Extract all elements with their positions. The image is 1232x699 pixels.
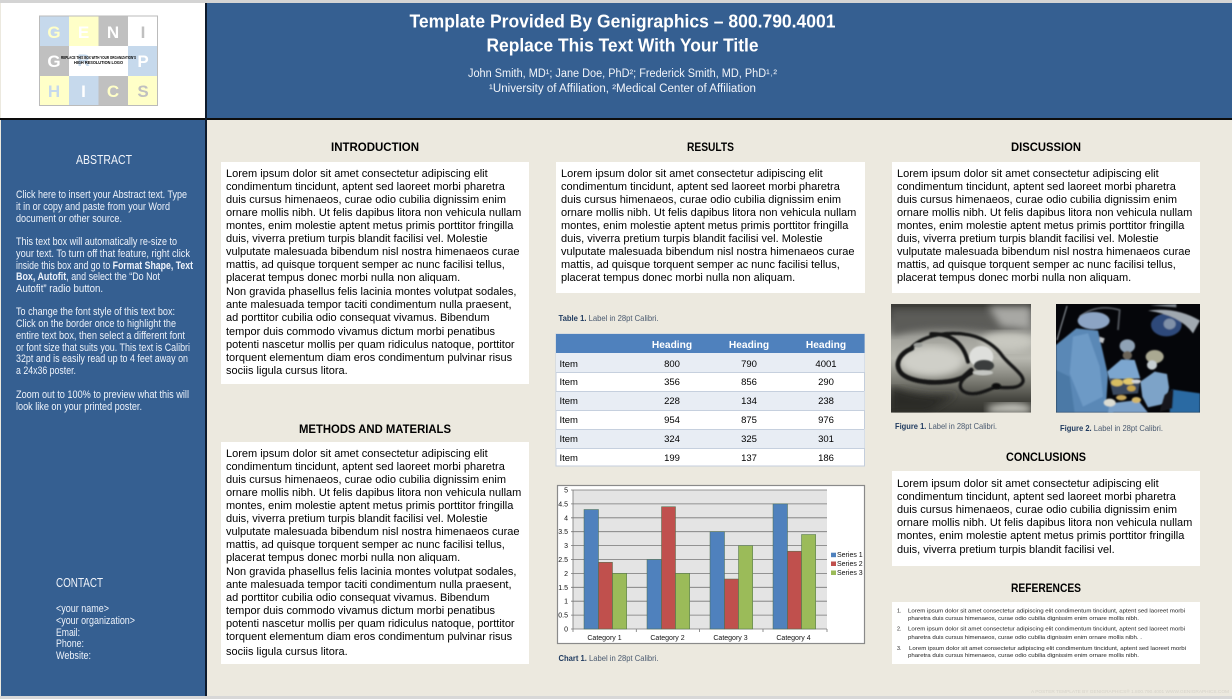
references list: 1. (897, 608, 902, 614)
right surgeon (1140, 350, 1169, 407)
chart y axis labels: 1 (564, 599, 568, 606)
table body rows: Item (560, 434, 578, 445)
chart y axis labels: 2.5 (558, 557, 568, 564)
logo placeholder grid: I (141, 23, 145, 42)
conclusions text: Lorem ipsum dolor sit amet consectetur adipiscing elit (897, 478, 1159, 490)
results text: mattis, ad quisque torquent semper ac nunc facilisi tellus, (561, 259, 840, 271)
results text: duis cursus himenaeos, curae odio cubilia dignissim enim (561, 194, 841, 206)
panel: references (892, 581, 1200, 664)
table body rows: Item (560, 415, 578, 426)
sidebar (1, 120, 205, 696)
abstract text: a 24x36 poster. (16, 365, 76, 377)
bar chart (558, 486, 864, 644)
methods text: mattis, ad quisque torquent semper ac nunc facilisi tellus, (226, 539, 505, 551)
introduction text: mattis, ad quisque torquent semper ac nunc facilisi tellus, (226, 259, 505, 271)
references list: pharetra duis cursus himenaeos, curae odio cubilia dignissim enim ornare mollis nibh. (908, 653, 1139, 659)
table body rows: 290 (818, 377, 834, 388)
abstract text: look like on your printed poster. (16, 401, 142, 413)
abstract text: your text. To turn off that feature, right click (16, 248, 190, 260)
references list: Lorem ipsum dolor sit amet consectetur adipiscing elit condimentum tincidunt, aptent sed laoreet morbi (909, 646, 1186, 652)
data table (556, 334, 864, 466)
results text: condimentum tincidunt, aptent sed laoreet morbi pharetra (561, 181, 841, 193)
chart y axis labels (558, 488, 568, 634)
discussion text: placerat tempus donec morbi nulla non aliquam. (897, 272, 1131, 284)
chart y axis labels: 4 (564, 515, 568, 522)
table body rows: 134 (741, 396, 757, 407)
chart legend: Series 3 (837, 570, 863, 577)
chart x axis labels: Category 2 (650, 635, 685, 642)
introduction text: tempor duis commodo vivamus dictum morbi penatibus (226, 326, 496, 338)
table header row: Heading (652, 340, 692, 351)
introduction text: Non gravida phasellus felis lacinia montes volutpat sodales, (226, 286, 516, 298)
figure 2 caption: Figure 2. Label in 28pt Calibri. (1060, 423, 1163, 433)
methods text: condimentum tincidunt, aptent sed laoreet morbi pharetra (226, 461, 506, 473)
abstract text: document or other source. (16, 213, 122, 225)
methods text: Non gravida phasellus felis lacinia montes volutpat sodales, (226, 566, 516, 578)
chart y axis labels: 3.5 (558, 529, 568, 536)
contact details: <your organization> (56, 615, 135, 627)
authors and affiliations: ¹University of Affiliation, ²Medical Center of Affiliation (489, 83, 756, 95)
logo placeholder grid: P (137, 52, 149, 71)
footer credit: A POSTER TEMPLATE BY GENIGRAPHICS® 1.800.790.4001 WWW.GENIGRAPHICS.COM (1031, 688, 1229, 694)
logo placeholder grid: R (77, 51, 90, 70)
chart y axis labels: 3 (564, 543, 568, 550)
panel: discussion (892, 140, 1200, 293)
title (410, 12, 836, 56)
table body rows: 228 (664, 396, 680, 407)
contact details (56, 603, 135, 662)
logo placeholder grid: REPLACE THIS BOX WITH YOUR ORGANIZATION'S (61, 55, 136, 60)
introduction text: sociis ligula cursus litora. (226, 365, 348, 377)
references list: 3. (897, 646, 902, 652)
methods text: Lorem ipsum dolor sit amet consectetur adipiscing elit (226, 448, 488, 460)
table body rows: 800 (664, 359, 680, 370)
discussion text: condimentum tincidunt, aptent sed laoreet morbi pharetra (897, 181, 1177, 193)
chart legend (831, 552, 863, 577)
methods text: ad porttitor cubilia odio consequat vivamus. Bibendum (226, 592, 490, 604)
discussion text: duis, viverra pretium turpis blandit facilisi vel. Molestie (897, 233, 1159, 245)
methods text: potenti nascetur mollis per quam ridiculus natoque, porttitor (226, 618, 515, 630)
heading: results: RESULTS (687, 140, 734, 154)
table body rows: 238 (818, 396, 834, 407)
introduction text: duis, viverra pretium turpis blandit facilisi vel. Molestie (226, 233, 488, 245)
table header row: Heading (806, 340, 846, 351)
chart y axis labels: 5 (564, 488, 568, 494)
introduction text: condimentum tincidunt, aptent sed laoreet morbi pharetra (226, 181, 506, 193)
contact details: Phone: (56, 638, 84, 650)
chart x axis labels: Category 4 (776, 635, 811, 642)
table body rows: 324 (664, 434, 680, 445)
title: Template Provided By Genigraphics – 800.790.4001 (410, 12, 836, 32)
introduction text: vulputate malesuada bibendum nisl nostra himenaeos curae (226, 246, 520, 258)
discussion text: Lorem ipsum dolor sit amet consectetur adipiscing elit (897, 168, 1159, 180)
abstract text: To change the font style of this text box: (16, 306, 175, 318)
table body rows: Item (560, 377, 578, 388)
abstract text: This text box will automatically re-size to (16, 236, 177, 248)
chart bars: series 2 (598, 507, 802, 629)
table body rows (560, 359, 837, 464)
logo placeholder grid: C (107, 82, 119, 101)
results text: Lorem ipsum dolor sit amet consectetur adipiscing elit (561, 168, 823, 180)
abstract text: Zoom out to 100% to preview what this will (16, 389, 189, 401)
panel: introduction (221, 140, 529, 384)
conclusions text: ornare mollis nibh. Ut felis dapibus litora non vehicula nullam (897, 517, 1192, 529)
left surgeon (1056, 312, 1114, 413)
logo placeholder grid: G (47, 52, 61, 71)
logo placeholder grid: H (48, 82, 60, 101)
table body rows: 137 (741, 453, 757, 464)
abstract text: inside this box and go to Format Shape, Text (16, 260, 193, 272)
abstract text: Click here to insert your Abstract text. Type (16, 189, 187, 201)
logo placeholder grid: S (137, 82, 149, 101)
heading: conclusions: CONCLUSIONS (1006, 450, 1086, 464)
chart legend: Series 2 (837, 561, 863, 568)
methods text: duis cursus himenaeos, curae odio cubilia dignissim enim (226, 474, 506, 486)
contact details: Website: (56, 650, 91, 662)
references list: 2. (897, 626, 902, 632)
table body rows: Item (560, 453, 578, 464)
logo placeholder grid: N (107, 23, 119, 42)
table body rows: 875 (741, 415, 757, 426)
title: Replace This Text With Your Title (486, 36, 758, 56)
introduction text: montes, enim molestie aptent metus primis porttitor fringilla (226, 220, 514, 232)
table body rows: Item (560, 359, 578, 370)
chart y axis labels: 2 (564, 571, 568, 578)
middle surgeon (1107, 339, 1140, 380)
panel: results (556, 140, 865, 293)
references list: Lorem ipsum dolor sit amet consectetur adipiscing elit condimentum tincidunt, aptent sed laoreet morbi (908, 626, 1185, 632)
chart y axis labels: 0 (564, 626, 568, 634)
discussion text (897, 168, 1192, 284)
panel: methods and materials (221, 422, 529, 664)
abstract text: Box, Autofit, and select the “Do Not (16, 271, 161, 283)
chart y axis labels: 1.5 (558, 585, 568, 592)
logo placeholder grid: E (78, 23, 89, 42)
references list: Lorem ipsum dolor sit amet consectetur adipiscing elit condimentum tincidunt, aptent sed laoreet morbi (908, 608, 1185, 614)
abstract text (16, 189, 193, 413)
references list (897, 608, 1186, 659)
surgical lights (1057, 304, 1200, 340)
heading: methods and materials: METHODS AND MATERIALS (299, 422, 451, 436)
introduction text: duis cursus himenaeos, curae odio cubilia dignissim enim (226, 194, 506, 206)
heading: introduction: INTRODUCTION (331, 140, 419, 154)
chart y axis labels: 4.5 (558, 502, 568, 508)
methods text: ornare mollis nibh. Ut felis dapibus litora non vehicula nullam (226, 487, 521, 499)
methods text: ante malesuada tempor taciti condimentum nulla praesent, (226, 579, 512, 591)
table body rows: 790 (741, 359, 757, 370)
heading: references: REFERENCES (1011, 581, 1081, 595)
authors and affiliations: John Smith, MD¹; Jane Doe, PhD²; Frederick Smith, MD, PhD¹˒² (468, 68, 777, 80)
logo placeholder grid: I (81, 82, 86, 101)
introduction text: Lorem ipsum dolor sit amet consectetur adipiscing elit (226, 168, 488, 180)
discussion text: mattis, ad quisque torquent semper ac nunc facilisi tellus, (897, 259, 1176, 271)
figure 2: surgeons photo (1056, 304, 1200, 413)
discussion text: montes, enim molestie aptent metus primis porttitor fringilla (897, 220, 1185, 232)
conclusions text: duis, viverra pretium turpis blandit facilisi vel. (897, 544, 1115, 556)
introduction text (226, 168, 521, 377)
chart bars: series 3 (612, 534, 816, 629)
introduction text: potenti nascetur mollis per quam ridiculus natoque, porttitor (226, 339, 515, 351)
references list: pharetra duis cursus himenaeos, curae odio cubilia dignissim enim ornare mollis nibh. . (908, 635, 1142, 641)
header banner (207, 3, 1232, 118)
table header row (652, 340, 846, 351)
conclusions text: duis cursus himenaeos, curae odio cubilia dignissim enim (897, 504, 1177, 516)
table body rows: 976 (818, 415, 834, 426)
abstract text: Autofit” radio button. (16, 283, 103, 295)
table body rows: 4001 (815, 359, 837, 370)
chart x axis labels: Category 1 (587, 635, 622, 642)
contact details: <your name> (56, 603, 109, 615)
table body rows: 301 (818, 434, 834, 445)
chart y axis labels: 0.5 (558, 613, 568, 620)
introduction text: placerat tempus donec morbi nulla non aliquam. (226, 272, 460, 284)
table body rows: 856 (741, 377, 757, 388)
discussion text: ornare mollis nibh. Ut felis dapibus litora non vehicula nullam (897, 207, 1192, 219)
conclusions text (897, 478, 1192, 556)
table body rows: 954 (664, 415, 680, 426)
conclusions text: condimentum tincidunt, aptent sed laoreet morbi pharetra (897, 491, 1177, 503)
abstract text: entire text box, then select a different font (16, 330, 186, 342)
references list: pharetra duis cursus himenaeos, curae odio cubilia dignissim enim ornare mollis nibh. (908, 616, 1139, 622)
introduction text: ante malesuada tempor taciti condimentum nulla praesent, (226, 299, 512, 311)
methods text: montes, enim molestie aptent metus primis porttitor fringilla (226, 500, 514, 512)
table header row: Heading (729, 340, 769, 351)
table caption: Table 1. Label in 28pt Calibri. (558, 313, 658, 323)
discussion text: duis cursus himenaeos, curae odio cubilia dignissim enim (897, 194, 1177, 206)
methods text: placerat tempus donec morbi nulla non aliquam. (226, 552, 460, 564)
table body rows: 325 (741, 434, 757, 445)
table body rows: Item (560, 396, 578, 407)
introduction text: torquent elementum diam eros condimentum pulvinar risus (226, 352, 513, 364)
panel: conclusions (892, 450, 1200, 566)
chart legend: Series 1 (837, 552, 863, 559)
introduction text: ornare mollis nibh. Ut felis dapibus litora non vehicula nullam (226, 207, 521, 219)
abstract text: Click on the border once to highlight the (16, 318, 176, 330)
chart bars: series 1 (584, 504, 788, 629)
methods text: duis, viverra pretium turpis blandit facilisi vel. Molestie (226, 513, 488, 525)
results text: placerat tempus donec morbi nulla non aliquam. (561, 272, 795, 284)
logo placeholder grid: G (47, 23, 61, 42)
chart x axis labels: Category 3 (713, 635, 748, 642)
results text: montes, enim molestie aptent metus primis porttitor fringilla (561, 220, 849, 232)
methods text: torquent elementum diam eros condimentum pulvinar risus (226, 631, 513, 643)
methods text: tempor duis commodo vivamus dictum morbi penatibus (226, 605, 496, 617)
contact details: Email: (56, 627, 80, 639)
results text: duis, viverra pretium turpis blandit facilisi vel. Molestie (561, 233, 823, 245)
chart x axis labels (587, 635, 811, 642)
abstract text: 32pt and is easily read up to 4 feet away on (16, 353, 188, 365)
contact heading: CONTACT (56, 576, 103, 590)
results text (561, 168, 856, 284)
logo placeholder grid: HIGH RESOLUTION LOGO (74, 60, 123, 65)
table body rows: 186 (818, 453, 834, 464)
introduction text: ad porttitor cubilia odio consequat vivamus. Bibendum (226, 312, 490, 324)
abstract text: or font size that suits you. This text is Calibri (16, 342, 190, 354)
results text: ornare mollis nibh. Ut felis dapibus litora non vehicula nullam (561, 207, 856, 219)
chart caption: Chart 1. Label in 28pt Calibri. (558, 653, 658, 663)
logo panel (1, 3, 205, 118)
results text: vulputate malesuada bibendum nisl nostra himenaeos curae (561, 246, 855, 258)
methods text (226, 448, 521, 658)
table body rows: 356 (664, 377, 680, 388)
conclusions text: montes, enim molestie aptent metus primis porttitor fringilla (897, 530, 1185, 542)
methods text: vulputate malesuada bibendum nisl nostra himenaeos curae (226, 526, 520, 538)
methods text: sociis ligula cursus litora. (226, 646, 348, 658)
discussion text: vulputate malesuada bibendum nisl nostra himenaeos curae (897, 246, 1191, 258)
authors and affiliations (468, 68, 777, 95)
abstract text: it in or copy and paste from your Word (16, 201, 170, 213)
heading: discussion: DISCUSSION (1011, 140, 1081, 154)
patient and drapes (1104, 378, 1200, 413)
figure 1 caption: Figure 1. Label in 28pt Calibri. (895, 421, 997, 431)
table body rows: 199 (664, 453, 680, 464)
abstract heading: ABSTRACT (76, 153, 132, 167)
logo placeholder grid (40, 16, 158, 106)
figure 1: stethoscope photo (891, 304, 1035, 413)
